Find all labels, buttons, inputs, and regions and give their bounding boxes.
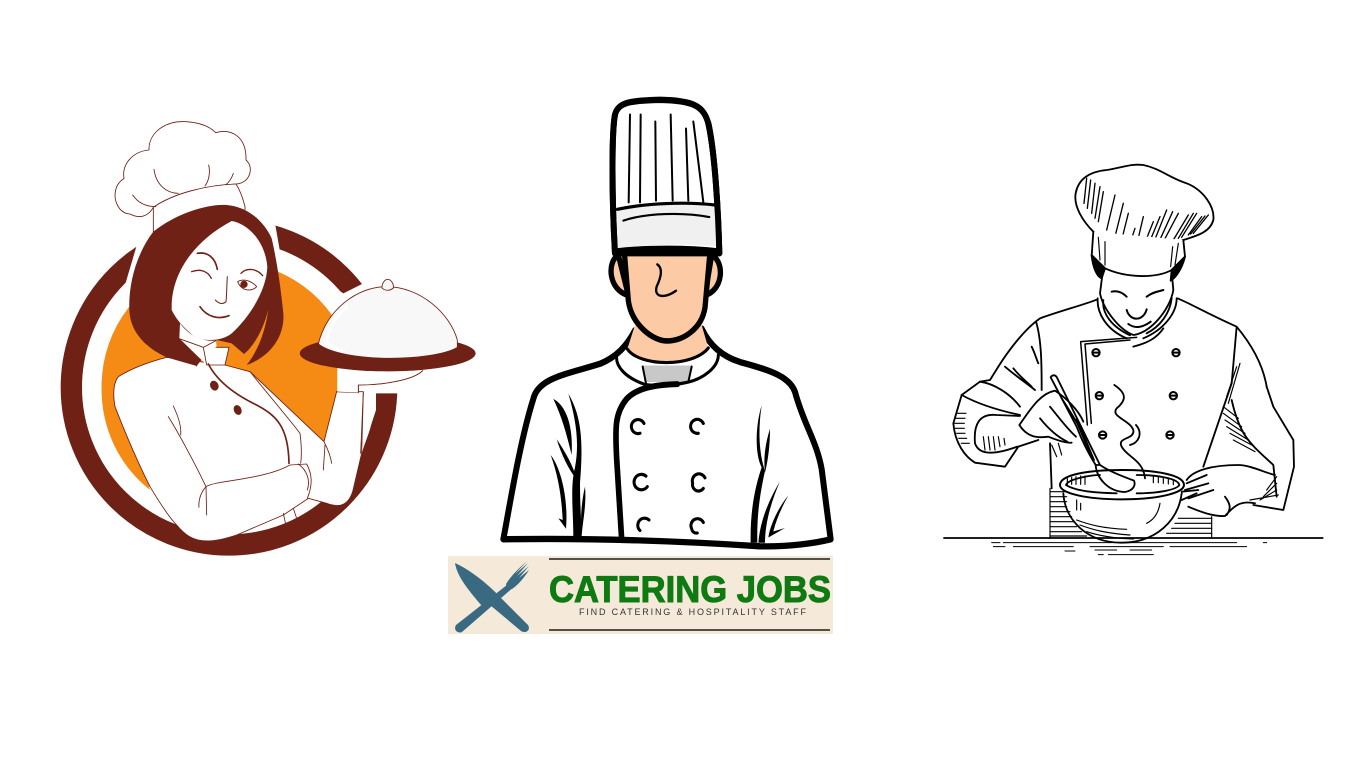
hat pleats (629, 115, 703, 202)
sleeve folds left (551, 394, 585, 538)
illustration: line-art chef stirring a pot (944, 165, 1323, 555)
sleeve folds right (751, 405, 788, 543)
neck and grey undershirt (627, 325, 708, 363)
logo title: CATERING JOBS (549, 569, 831, 610)
serving tray (300, 335, 476, 371)
hat band (1092, 232, 1185, 276)
torso and jacket (998, 298, 1267, 488)
jacket buttons (1092, 349, 1180, 439)
body with jacket (114, 357, 363, 541)
right sleeve (1232, 387, 1294, 510)
left sleeve (953, 367, 1038, 467)
cloche knob (382, 279, 393, 290)
double-breasted placket (1081, 337, 1137, 425)
hand under tray (337, 371, 423, 393)
buttons (631, 419, 705, 533)
hat band (617, 203, 718, 249)
table line (944, 535, 1323, 541)
illustration: female chef holding cloche (71, 122, 476, 545)
collar (617, 355, 718, 385)
chef hat (115, 122, 250, 232)
jacket (503, 329, 831, 546)
hair (129, 205, 283, 366)
white gaps in ring (125, 210, 417, 453)
nose (656, 264, 676, 296)
eyes, nose, mouth (1112, 290, 1163, 327)
face (1100, 272, 1173, 335)
pot handle (1182, 490, 1198, 500)
placket (616, 384, 677, 539)
face (624, 252, 710, 341)
orange circle (102, 260, 356, 515)
left hand (1019, 391, 1083, 443)
hat folds (1084, 178, 1208, 247)
chef hat (1075, 165, 1213, 248)
orange refill behind figure (217, 271, 337, 443)
ears (611, 255, 720, 295)
brown ring (71, 230, 387, 545)
face (172, 221, 267, 340)
cooking pot (1060, 470, 1184, 499)
steam (1114, 385, 1145, 478)
right hand on pot handle (1185, 465, 1275, 516)
logo tagline: FIND CATERING & HOSPITALITY STAFF (579, 607, 806, 617)
jacket details and buttons (168, 364, 423, 523)
neck and collar (179, 323, 229, 365)
tall hat crown (612, 100, 719, 253)
icon: crossed knife and fork (455, 561, 529, 633)
cloche dome (318, 287, 457, 358)
collar (1098, 298, 1177, 338)
ladle (1051, 375, 1100, 465)
logo rule lines (549, 559, 830, 630)
facial features (192, 253, 263, 318)
hair sides (1092, 255, 1185, 281)
table shadow dashes (992, 543, 1267, 555)
apron stripes (1050, 488, 1212, 538)
illustration: chef bust in tall hat (503, 100, 831, 546)
logo background (448, 556, 833, 634)
logo: Catering Jobs banner (448, 556, 833, 634)
